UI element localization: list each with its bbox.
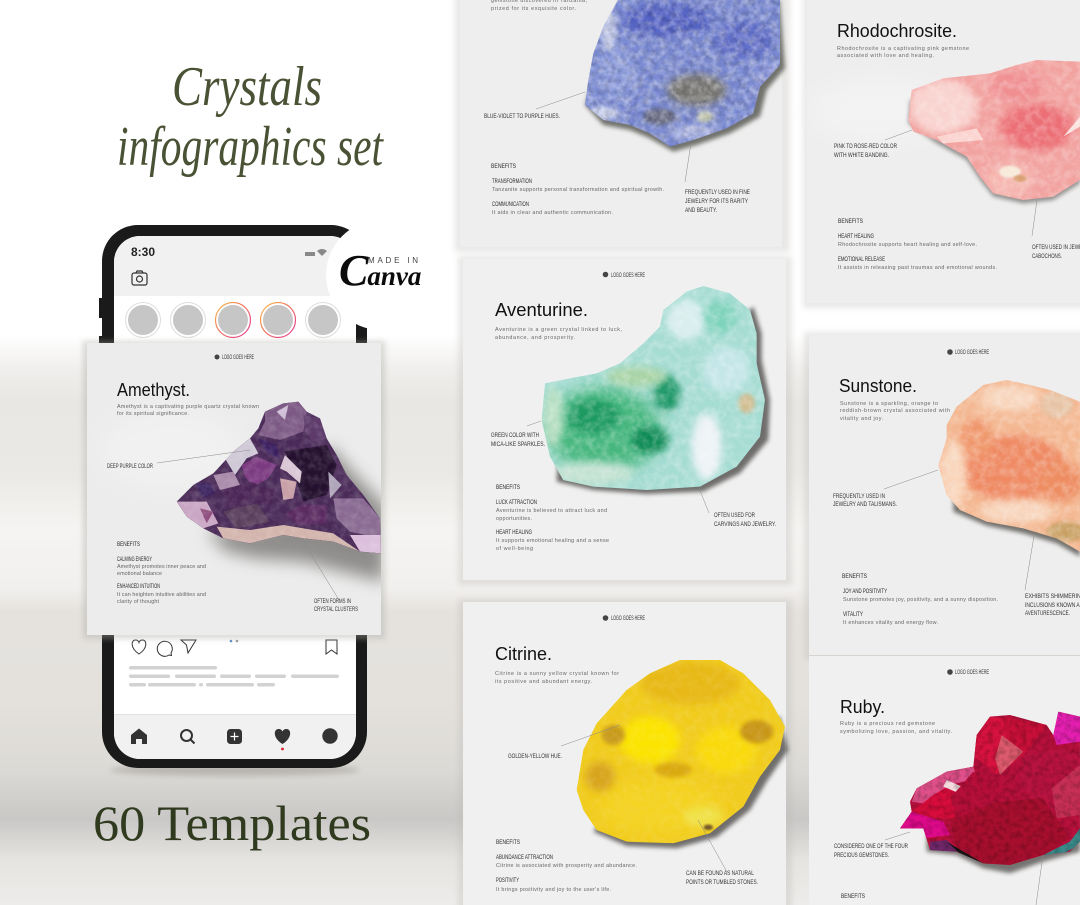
description (491, 0, 588, 12)
icon: add (227, 729, 242, 744)
benefits: BENEFITS (838, 218, 863, 225)
callout: jewelry (1032, 200, 1080, 260)
title: infographics set (117, 116, 384, 178)
description: abundance, and prosperity. (495, 335, 575, 341)
panel: Ruby card (809, 656, 1080, 905)
benefits: It assists in releasing past traumas and emotional wounds. (838, 265, 997, 271)
benefits (117, 541, 206, 605)
heading: Aventurine. (495, 300, 588, 320)
icon: search (181, 730, 194, 744)
callout: colour (107, 450, 250, 470)
callout: forms: CAN BE FOUND AS NATURAL (686, 870, 754, 877)
callout: uses (699, 488, 776, 528)
phone mockup (99, 225, 367, 776)
crystal: amethyst (176, 402, 381, 554)
benefits (838, 218, 997, 271)
benefits: Aventurine is believed to attract luck and (496, 508, 607, 514)
callout: colour: DEEP PURPLE COLOR (107, 463, 153, 470)
panel: Amethyst card (83, 341, 387, 639)
caption placeholder bars (129, 666, 339, 686)
panel: Tanzanite card (484, 0, 788, 214)
carousel dots (230, 640, 238, 642)
icon: home (131, 728, 147, 744)
heading: Rhodochrosite. (837, 21, 957, 41)
description: its positive and abundant energy. (495, 679, 592, 685)
description (495, 327, 622, 341)
logo: LOGO GOES HERE (222, 354, 254, 361)
benefits: It aids in clear and authentic communication. (492, 210, 613, 216)
callout: precious: CONSIDERED ONE OF THE FOUR (834, 843, 908, 850)
callout: hue (508, 725, 620, 760)
description (117, 404, 259, 417)
heading: Citrine. (495, 644, 552, 664)
badge: made in Canva: Canva (339, 246, 421, 295)
benefits: ABUNDANCE ATTRACTION (496, 854, 553, 861)
crystal shadow (593, 717, 788, 848)
post action icons (132, 640, 337, 656)
icon: profile (322, 728, 338, 744)
logo (603, 272, 645, 279)
benefits: LUCK ATTRACTION (496, 499, 537, 506)
callout: uses (833, 470, 938, 508)
crystal shadow (927, 822, 1080, 873)
crystal shadow (585, 0, 785, 152)
crystal: sunstone (935, 377, 1080, 557)
benefits: Sunstone promotes joy, positivity, and a sunny disposition. (843, 597, 998, 603)
benefits: Rhodochrosite supports heart healing and self-love. (838, 242, 977, 248)
crystal: ruby (897, 708, 1080, 868)
logo (603, 615, 645, 622)
callout: forms: OFTEN FORMS IN (314, 598, 351, 605)
description: Citrine is a sunny yellow crystal known for (495, 671, 619, 677)
callout: hues: BLUE-VIOLET TO PURPLE HUES. (484, 113, 560, 120)
description: Aventurine is a green crystal linked to luck, (495, 327, 622, 333)
callout: colour: GREEN COLOR WITH (491, 432, 539, 439)
description: associated with love and healing. (837, 53, 934, 59)
crystal: rhodochrosite (905, 57, 1080, 203)
panel: Sunstone card (809, 335, 1080, 655)
heading: Sunstone. (839, 376, 917, 396)
callout: colour: WITH WHITE BANDING. (834, 152, 889, 159)
benefits: JOY AND POSITIVITY (843, 588, 887, 595)
callout: precious (834, 832, 910, 859)
logo (947, 669, 989, 676)
benefits: BENEFITS (496, 839, 520, 846)
benefits: EMOTIONAL RELEASE (838, 256, 885, 263)
icon: heart (275, 729, 290, 744)
benefits: clarity of thought (117, 599, 160, 605)
callout: jewelry: AND BEAUTY. (685, 207, 717, 214)
callout: colour: MICA-LIKE SPARKLES. (491, 441, 545, 448)
description (840, 721, 952, 735)
logo: LOGO GOES HERE (955, 349, 989, 356)
benefits: It enhances vitality and energy flow. (843, 620, 938, 626)
panel: Rhodochrosite card (808, 24, 1080, 270)
benefits: It brings positivity and joy to the user's life. (496, 887, 611, 893)
callout: uses: JEWELRY AND TALISMANS. (833, 501, 897, 508)
icon: camera (132, 271, 147, 285)
benefits: It can heighten intuitive abilities and (117, 592, 206, 598)
heading: Amethyst. (117, 380, 190, 400)
bottom navigation bar (114, 714, 356, 759)
description: reddish-brown crystal associated with (840, 408, 950, 414)
benefits: TRANSFORMATION (492, 178, 532, 185)
callout: uses: OFTEN USED FOR (714, 512, 755, 519)
benefits (496, 484, 609, 552)
crystal shadow (908, 100, 1080, 203)
callout: jewelry: JEWELRY FOR ITS RARITY (685, 198, 748, 205)
benefits: ENHANCED INTUITION (117, 583, 160, 590)
badge: made in Canva: MADE IN (368, 256, 418, 265)
description: Rhodochrosite is a captivating pink gemstone (837, 46, 969, 52)
benefits: HEART HEALING (838, 233, 874, 240)
benefits (842, 573, 998, 626)
footer headline: 60 Templates (93, 795, 371, 851)
title (117, 56, 384, 178)
callout: uses: FREQUENTLY USED IN (833, 493, 885, 500)
callout: hue: GOLDEN-YELLOW HUE. (508, 753, 562, 760)
logo: LOGO GOES HERE (611, 615, 645, 622)
description: for its spiritual significance. (117, 411, 189, 417)
callout: precious: PRECIOUS GEMSTONES. (834, 852, 889, 859)
callout line (1036, 855, 1043, 905)
description: Sunstone is a sparkling, orange to (840, 401, 938, 407)
logo: LOGO GOES HERE (611, 272, 645, 279)
benefits: BENEFITS (491, 163, 516, 170)
benefits (496, 839, 637, 893)
stories row (126, 302, 340, 338)
benefits: It supports emotional healing and a sense (496, 538, 609, 544)
benefits: COMMUNICATION (492, 201, 529, 208)
title: Crystals (172, 56, 322, 118)
callout: jewelry: CABOCHONS. (1032, 253, 1062, 260)
description (837, 46, 969, 59)
callout: colour: PINK TO ROSE-RED COLOR (834, 143, 897, 150)
callout: uses: CARVINGS AND JEWELRY. (714, 521, 776, 528)
benefits: BENEFITS (117, 541, 140, 548)
benefits (491, 163, 664, 216)
crystal shadow (207, 445, 387, 582)
benefits: CALMING ENERGY (117, 556, 152, 563)
crystal: aventurine (538, 283, 768, 493)
phone screen (114, 236, 356, 759)
benefits: POSITIVITY (496, 877, 519, 884)
status header (114, 236, 356, 296)
logo (214, 354, 254, 361)
benefits: opportunities. (496, 516, 532, 522)
description: Amethyst is a captivating purple quartz crystal known (117, 404, 259, 410)
benefits: Tanzanite supports personal transformation and spiritual growth. (492, 187, 664, 193)
callout: forms (303, 541, 358, 613)
phone shadow (110, 764, 360, 776)
crystal: tanzanite (580, 0, 783, 150)
callout: jewelry: FREQUENTLY USED IN FINE (685, 189, 750, 196)
callout: colour (491, 421, 545, 448)
callout: inclusions (1025, 536, 1080, 617)
crystal shadow (557, 307, 770, 494)
benefits: BENEFITS (496, 484, 520, 491)
crystal shadow (953, 468, 1080, 557)
callout: hues (484, 92, 585, 120)
callout: jewelry (685, 143, 750, 214)
description (840, 401, 950, 422)
callout: forms: CRYSTAL CLUSTERS (314, 606, 358, 613)
description: prized for its exquisite color. (491, 6, 576, 12)
benefits: HEART HEALING (496, 529, 532, 536)
benefits: Citrine is associated with prosperity and abundance. (496, 863, 637, 869)
panel: Aventurine card (463, 259, 786, 580)
benefits: of well-being (496, 546, 533, 552)
benefits: BENEFITS (841, 893, 865, 900)
logo: LOGO GOES HERE (955, 669, 989, 676)
callout: forms: POINTS OR TUMBLED STONES. (686, 879, 758, 886)
status header: 8:30 (131, 245, 155, 259)
callout: colour (834, 130, 912, 159)
badge: made in Canva (326, 220, 436, 330)
description: symbolizing love, passion, and vitality. (840, 729, 952, 735)
benefits: Amethyst promotes inner peace and (117, 564, 206, 570)
phone body (102, 225, 367, 768)
callout: forms (686, 820, 758, 886)
notification dot (281, 748, 284, 750)
panel: Citrine card (463, 602, 788, 905)
crystal: citrine (573, 657, 788, 847)
description: vitality and joy. (840, 416, 883, 422)
description (495, 671, 619, 685)
heading: Ruby. (840, 697, 885, 717)
benefits: VITALITY (843, 611, 863, 618)
benefits: BENEFITS (842, 573, 867, 580)
benefits: emotional balance (117, 571, 162, 577)
description: Ruby is a precious red gemstone (840, 721, 935, 727)
logo (947, 349, 989, 356)
